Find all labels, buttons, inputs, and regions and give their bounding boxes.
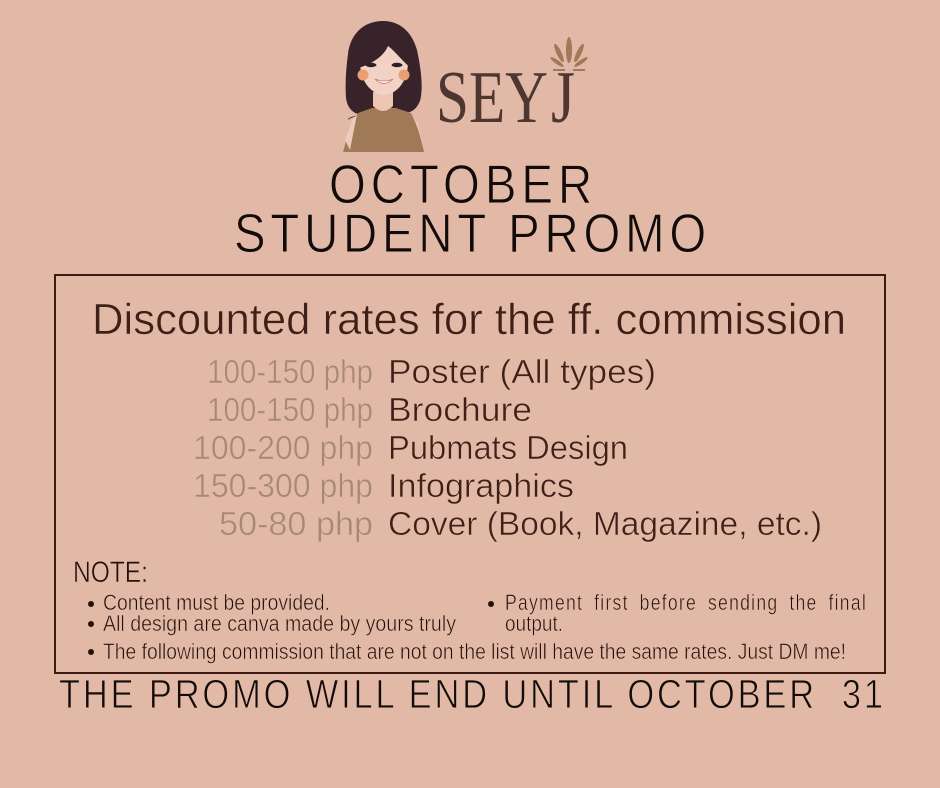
note list [88, 590, 866, 664]
title [234, 154, 706, 264]
icon: logo leaf [549, 37, 589, 71]
price list: Infographics [388, 467, 574, 504]
price list: Pubmats Design [388, 429, 628, 466]
title: OCTOBER [329, 154, 592, 215]
note list: All design are canva made by yours truly [103, 611, 456, 636]
price list: Brochure [388, 391, 532, 428]
price list: 100-200 php [193, 429, 373, 466]
note heading: NOTE: [73, 556, 148, 589]
logo wordmark: SEYJ: J [551, 57, 575, 139]
footer: promo end: THE PROMO WILL END UNTIL OCTOBER 31 [59, 672, 883, 718]
price list: Cover (Book, Magazine, etc.) [388, 505, 822, 542]
note list: Content must be provided. [103, 590, 330, 615]
price list: 100-150 php [207, 353, 373, 390]
price list: Poster (All types) [388, 353, 656, 390]
logo wordmark: SEYJ: SEY [436, 57, 548, 139]
panel heading: Discounted rates for the ff. commission [92, 295, 846, 344]
note list: The following commission that are not on the list will have the same rates. Just DM me! [103, 639, 846, 664]
note list: output. [505, 611, 563, 636]
price list: 50-80 php [219, 505, 373, 542]
title: STUDENT PROMO [234, 203, 706, 264]
sweater [343, 108, 424, 152]
icon: girl avatar [343, 21, 424, 152]
price list [193, 353, 822, 542]
hair back [346, 21, 422, 120]
price list: 100-150 php [207, 391, 373, 428]
face [360, 45, 408, 95]
panel: rates box [55, 275, 885, 673]
price list: 150-300 php [193, 467, 373, 504]
note list: Payment first before sending the final [505, 591, 866, 616]
fringe [358, 36, 411, 68]
shoulders [345, 114, 357, 150]
neck [373, 92, 393, 111]
